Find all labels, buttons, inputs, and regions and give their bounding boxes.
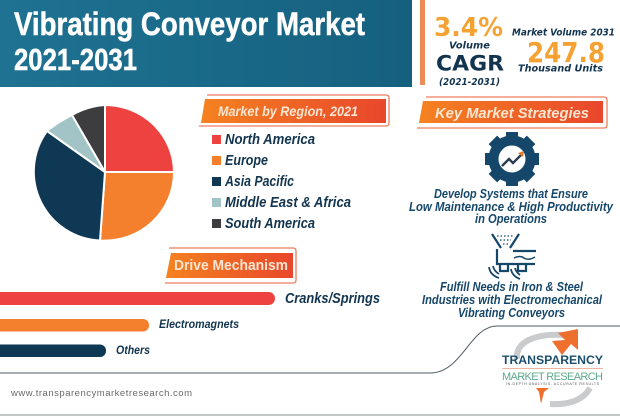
stat: market volume: Market Volume 2031 xyxy=(512,28,615,38)
legend item: Europe: Europe xyxy=(225,152,268,169)
text: strategy two: Industries with Electromechanical xyxy=(422,293,602,307)
text: strategy one: Develop Systems that Ensure xyxy=(434,187,588,201)
header band with title xyxy=(0,0,412,87)
banner: Market by Region: Market by Region, 2021 xyxy=(218,103,358,119)
slice: Asia Pacific xyxy=(34,131,105,240)
title xyxy=(14,6,365,77)
text: strategy one xyxy=(409,187,614,226)
logo: Transparency Market Research: TRANSPARENCY xyxy=(502,355,603,367)
logo: Transparency Market Research: IN-DEPTH ANALYSIS. ACCURATE RESULTS xyxy=(506,382,600,386)
banner: Key Market Strategies: Key Market Strategies xyxy=(435,105,589,122)
legend item: North America: North America xyxy=(225,131,315,148)
stat: volume CAGR: 3.4% xyxy=(434,13,503,43)
bar: Electromagnets xyxy=(0,319,239,332)
text: strategy two: Vibrating Conveyors xyxy=(458,306,565,320)
logo: Transparency Market Research xyxy=(502,329,603,404)
stat: market volume: 247.8 xyxy=(527,37,605,69)
slice: Middle East & Africa xyxy=(47,115,105,172)
slice: North America xyxy=(105,105,174,172)
stat: volume CAGR: Volume xyxy=(449,40,491,52)
footer url: www.transparencymarketresearch.com xyxy=(10,388,192,399)
footer divider curve xyxy=(0,326,620,373)
accent bar xyxy=(420,0,425,85)
slice: South America xyxy=(72,105,105,172)
stat: market volume xyxy=(512,28,615,74)
icon: vibrating conveyor xyxy=(489,234,536,279)
stat: market volume: Thousand Units xyxy=(518,64,603,74)
bar: Cranks/Springs xyxy=(0,291,380,307)
banner: Market by Region xyxy=(199,95,389,126)
legend xyxy=(212,131,351,232)
text: strategy two: Fulfill Needs in Iron & Steel xyxy=(440,280,583,294)
banner: Drive Mechanism xyxy=(165,248,296,283)
legend item: Asia Pacific: Asia Pacific xyxy=(224,173,295,190)
stat: volume CAGR xyxy=(434,13,504,88)
text: strategy one: in Operations xyxy=(475,212,547,226)
slice: Europe xyxy=(100,172,174,241)
stat: volume CAGR: CAGR xyxy=(436,52,504,76)
title: 2021-2031 xyxy=(14,42,137,77)
legend item: Middle East & Africa: Middle East & Africa xyxy=(225,194,351,211)
bar: Electromagnets: Electromagnets xyxy=(159,319,239,331)
icon: gear with rising arrow xyxy=(485,132,539,186)
bar chart: drive mechanism xyxy=(0,291,380,357)
bar: Cranks/Springs: Cranks/Springs xyxy=(285,291,380,307)
logo: Transparency Market Research: MARKET RESEARCH xyxy=(502,371,603,383)
title: Vibrating Conveyor Market xyxy=(14,6,365,42)
bar: Others: Others xyxy=(116,345,150,357)
banner: Key Market Strategies xyxy=(417,97,607,128)
stat: volume CAGR: (2021-2031) xyxy=(439,77,500,88)
text: strategy two xyxy=(422,280,602,320)
legend item: South America: South America xyxy=(225,215,315,232)
pie chart: market by region xyxy=(34,105,174,241)
banner: Drive Mechanism: Drive Mechanism xyxy=(174,257,288,274)
bar: Others xyxy=(0,344,150,357)
